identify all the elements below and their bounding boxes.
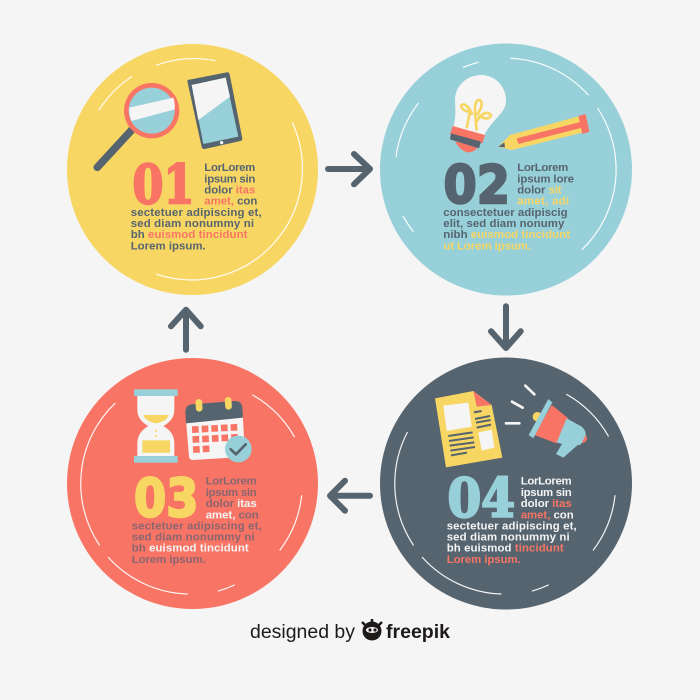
ring arcs 04 (395, 394, 615, 594)
panel: step 03 red circle (67, 358, 318, 609)
text block 04: bh euismod tincidunt (447, 543, 564, 555)
footer: designed by freepik: freepik (386, 622, 450, 643)
ring arcs 03 (81, 395, 302, 594)
text block 01: amet, con (204, 196, 257, 208)
text block 01: sed diam nonummy ni (131, 218, 254, 230)
footer: designed by freepik: designed by (250, 622, 356, 643)
text block 03: Lorem ipsum. (132, 554, 206, 566)
text block 04: sectetuer adipiscing et, (447, 521, 577, 533)
panel: step 02 blue circle (380, 44, 632, 296)
icon: document (435, 391, 502, 467)
text block 04: LorLorem (521, 476, 572, 488)
arrow: 01 to 02 (328, 154, 370, 184)
text block 02: elit, sed diam nonumy (443, 218, 565, 230)
number 03: 03 (134, 469, 198, 530)
text block 03: sed diam nonummy ni (132, 532, 255, 544)
text block 03: bh euismod tincidunt (132, 543, 249, 555)
text block 03: dolor itas (206, 498, 257, 510)
icon: light bulb (450, 75, 506, 152)
icon: pencil (498, 114, 589, 150)
text block 02 (443, 162, 574, 252)
text block 04: Lorem ipsum. (447, 554, 521, 566)
text block 02: ut Lorem ipsum. (443, 240, 531, 252)
text block 01: Lorem ipsum. (131, 240, 206, 252)
text block 01: ipsum sin (204, 173, 255, 185)
text block 03 (132, 476, 262, 566)
text block 01: dolor itas (204, 184, 255, 196)
icon: magnifying glass (97, 83, 179, 167)
text block 02: consectetuer adipiscig (443, 207, 568, 219)
text block 01: sectetuer adipiscing et, (131, 207, 262, 219)
icon: megaphone (506, 386, 587, 458)
number 01: 01 (132, 154, 194, 216)
text block 03: amet, con (206, 509, 259, 521)
footer: designed by freepik (250, 619, 450, 643)
text block 04: amet, con (521, 509, 574, 521)
panel: step 04 dark circle (380, 358, 632, 610)
text block 04: ipsum sin (521, 487, 572, 499)
text block 04: dolor itas (521, 498, 572, 510)
arrow: 03 to 01 (171, 310, 201, 350)
text block 01 (131, 162, 262, 252)
icon: smartphone (187, 72, 242, 149)
icon: freepik logo (362, 619, 382, 640)
icon: calendar with check (185, 397, 252, 462)
arrow: 02 to 04 (491, 306, 521, 348)
text block 03: ipsum sin (206, 487, 257, 499)
text block 04 (447, 476, 577, 566)
ring arcs 01 (99, 59, 302, 280)
ring arcs 02 (396, 58, 616, 249)
text block 02: ipsum lore (517, 173, 574, 185)
text block 02: LorLorem (517, 162, 568, 174)
number 04: 04 (448, 467, 515, 529)
text block 02: amet, adi (517, 196, 569, 208)
text block 01: bh euismod tincidunt (131, 229, 248, 241)
arrow: 04 to 03 (330, 481, 370, 511)
text block 04: sed diam nonummy ni (447, 532, 570, 544)
text block 02: nibh euismod tincidunt (443, 229, 570, 241)
icon: hourglass (134, 389, 178, 463)
text block 01: LorLorem (204, 162, 255, 174)
panel: step 01 yellow circle (67, 44, 318, 295)
text block 03: sectetuer adipiscing et, (132, 521, 262, 533)
text block 03: LorLorem (206, 476, 257, 488)
text block 02: dolor sit (517, 184, 562, 196)
number 02: 02 (444, 155, 510, 216)
